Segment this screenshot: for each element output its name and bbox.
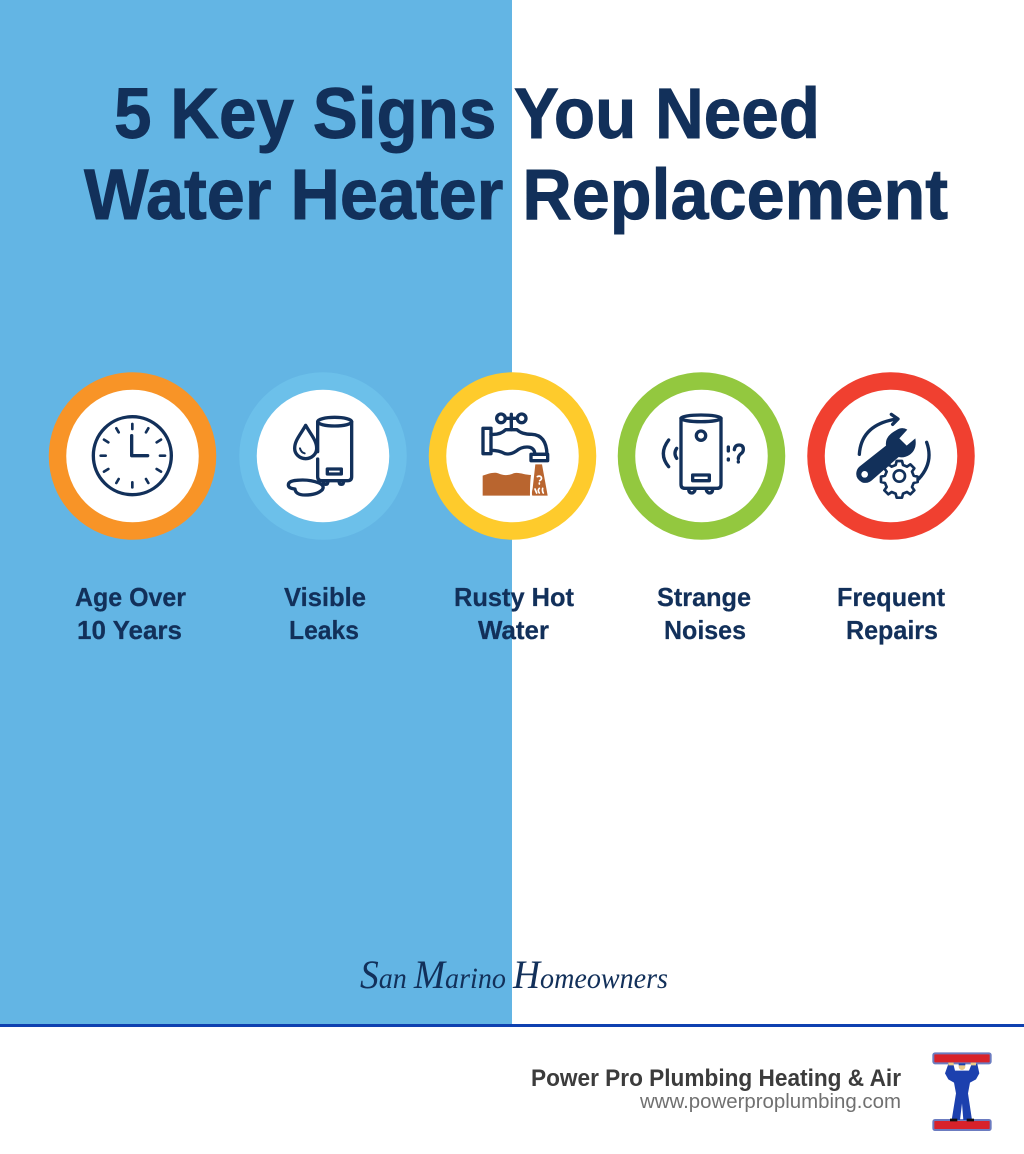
label: frequent repairs: Repairs xyxy=(846,615,938,645)
label: frequent repairs: Frequent xyxy=(837,582,945,612)
label: strange noises xyxy=(657,582,751,645)
sign 1: age over 10 years xyxy=(58,381,208,531)
sign 2: visible leaks xyxy=(248,381,398,531)
footer website: www.powerproplumbing.com xyxy=(639,1091,901,1113)
icon: faucet with rusty water xyxy=(483,414,548,496)
green ring xyxy=(626,381,776,531)
blue left background panel xyxy=(0,0,512,1024)
icon: noisy water heater xyxy=(663,415,743,493)
label: rusty hot water: Water xyxy=(478,615,549,645)
icon: wrench, gear and arrows xyxy=(856,414,929,498)
label: rusty hot water: Rusty Hot xyxy=(454,582,574,612)
label: strange noises: Strange xyxy=(657,582,751,612)
label: age over 10 years: Age Over xyxy=(75,582,186,612)
label: visible leaks: Leaks xyxy=(289,615,359,645)
label: age over 10 years xyxy=(75,582,186,645)
title: 5 Key Signs You Need xyxy=(114,75,820,154)
sign 4: strange noises xyxy=(626,381,776,531)
label: age over 10 years: 10 Years xyxy=(77,615,182,645)
sign 5: frequent repairs xyxy=(816,381,966,531)
icon: clock xyxy=(93,417,171,495)
logo: strongman holding bars xyxy=(933,1053,991,1130)
label: visible leaks xyxy=(284,582,366,645)
sign 3: rusty hot water xyxy=(438,381,588,531)
label: visible leaks: Visible xyxy=(284,582,366,612)
footer rule xyxy=(0,1024,1024,1027)
red ring xyxy=(816,381,966,531)
title xyxy=(84,75,948,235)
label: frequent repairs xyxy=(837,582,945,645)
orange ring xyxy=(58,381,208,531)
icon: leaking water heater xyxy=(288,417,352,495)
title: Water Heater Replacement xyxy=(84,156,948,235)
label: strange noises: Noises xyxy=(664,615,746,645)
labels xyxy=(75,582,945,645)
label: rusty hot water xyxy=(454,582,574,645)
yellow ring xyxy=(438,381,588,531)
footer company name: Power Pro Plumbing Heating & Air xyxy=(531,1065,901,1092)
script subtitle: San Marino Homeowners xyxy=(360,952,668,997)
light blue ring xyxy=(248,381,398,531)
